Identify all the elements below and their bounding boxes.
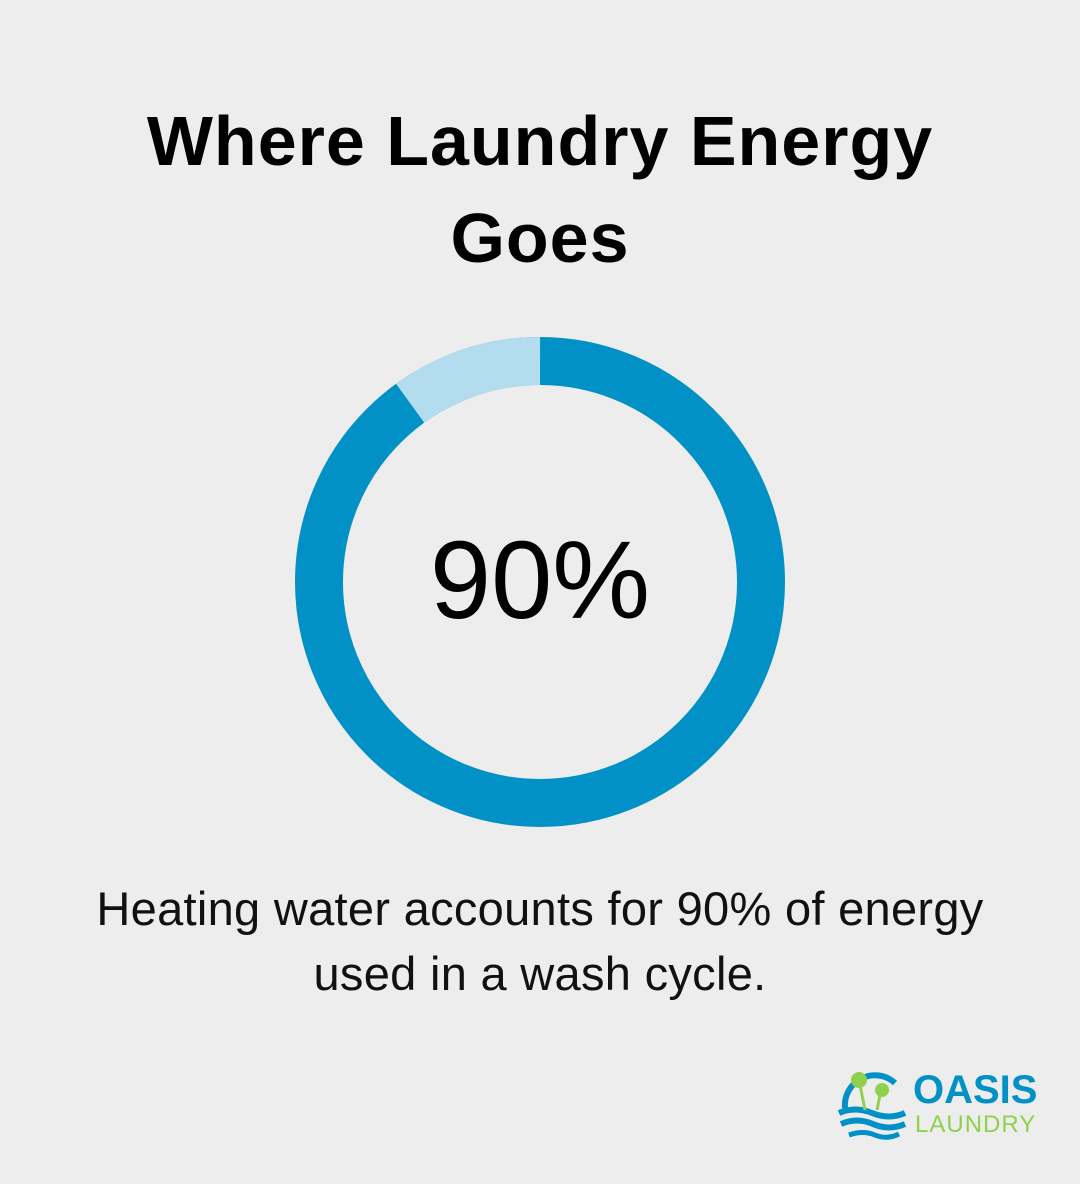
title: Where Laundry Energy (147, 102, 933, 180)
title: Goes (450, 199, 630, 277)
logo: Oasis Laundry: LAUNDRY (915, 1111, 1036, 1138)
caption text: Heating water accounts for 90% of energy (96, 882, 984, 935)
caption text (96, 882, 984, 1000)
donut chart: 90% (430, 519, 650, 642)
caption text: used in a wash cycle. (313, 947, 767, 1000)
title (147, 102, 933, 277)
logo: Oasis Laundry (838, 1068, 1037, 1140)
logo: Oasis Laundry: OASIS (913, 1068, 1037, 1112)
